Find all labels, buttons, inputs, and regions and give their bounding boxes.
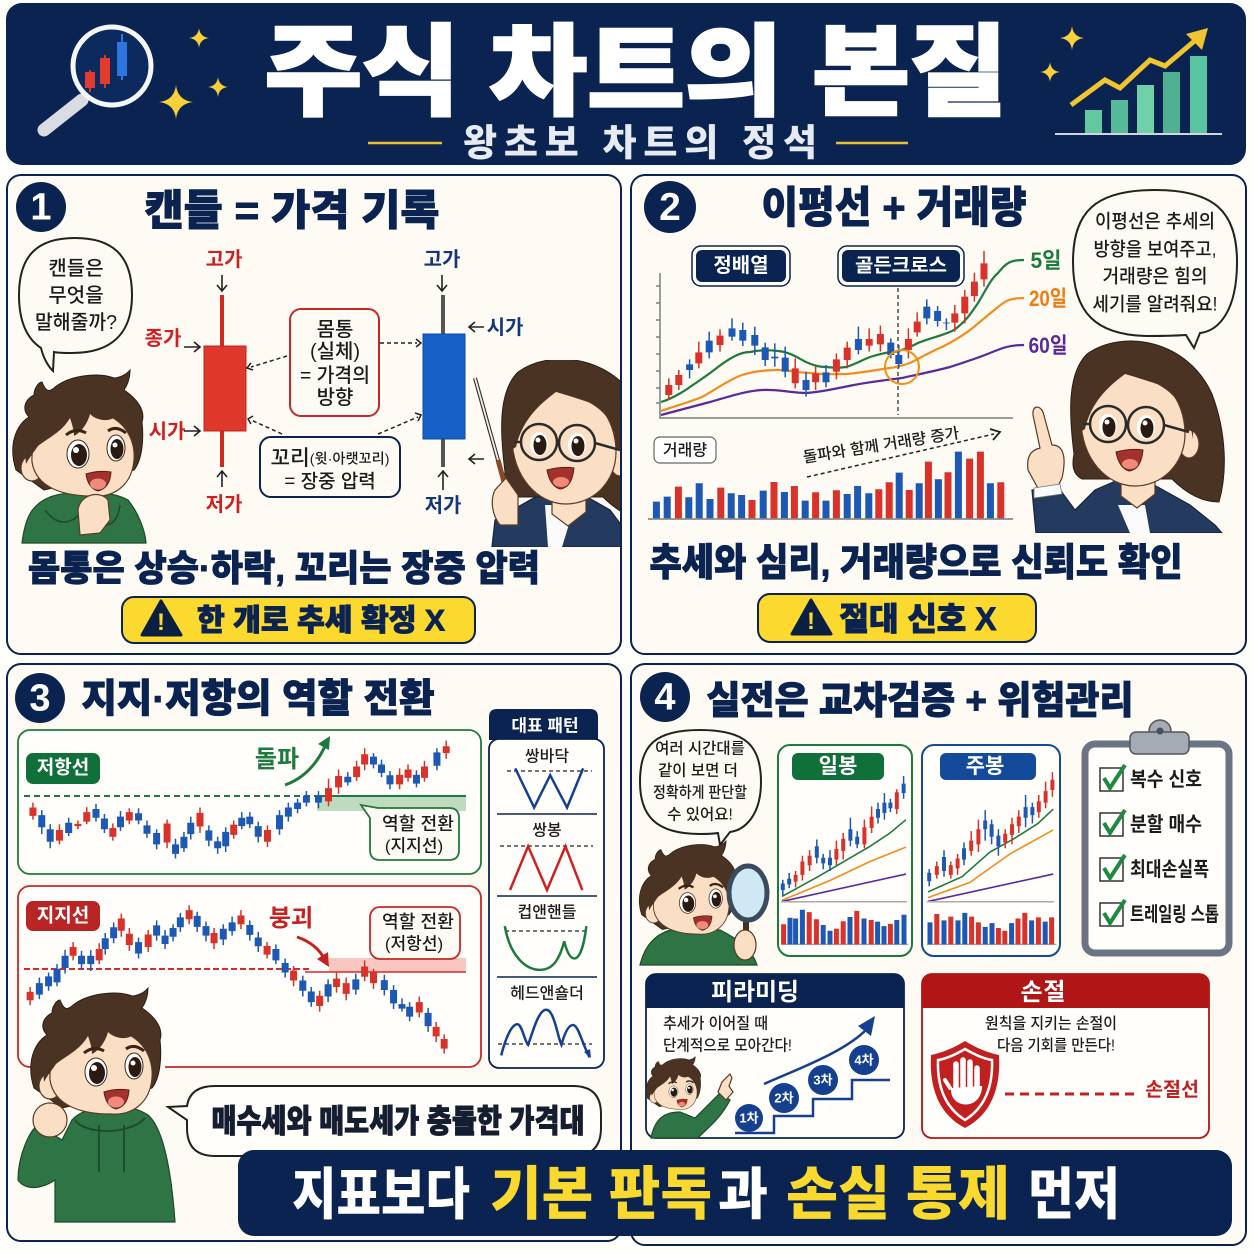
pyramiding card — [646, 974, 904, 1138]
character: boy with fist — [18, 988, 175, 1222]
check item 4 — [1100, 900, 1219, 926]
clipboard checklist — [1085, 720, 1229, 953]
heading 1: 캔들 = 가격 기록 — [144, 187, 440, 234]
speech bubble: boy question — [19, 238, 132, 371]
bottom banner: 과 — [718, 1163, 768, 1226]
tag: resistance line: 저항선 — [37, 757, 89, 779]
badge 2: 2 — [659, 186, 681, 229]
label: golden cross: 골든크로스 — [855, 256, 947, 277]
candlestick chart with moving averages — [656, 251, 1024, 418]
pattern: cup and handle — [505, 903, 588, 970]
blue candle diagram — [423, 248, 523, 517]
pyramiding card: 피라미딩 — [711, 979, 799, 1006]
check item 1: 복수 신호 — [1130, 768, 1202, 791]
breakdown label and arrow: 붕괴 — [269, 905, 313, 932]
legend: MA periods — [1028, 248, 1068, 358]
support chart box — [18, 886, 481, 1067]
callout: body: = 가격의 — [300, 364, 370, 387]
rising arrow — [764, 1016, 875, 1084]
volume bars — [648, 452, 1013, 519]
callout: wick: 꼬리(윗·아랫꼬리) — [270, 447, 390, 470]
bottom banner: 손실 통제 — [786, 1162, 1010, 1227]
red candle diagram — [145, 248, 246, 516]
pattern: double top — [500, 821, 593, 890]
icon: rising bar chart with arrow — [1040, 26, 1222, 134]
speech bubble: teacher explanation: 세기를 알려줘요! — [1092, 294, 1218, 316]
stop-loss card: 손절 — [1020, 979, 1066, 1006]
callout: becomes support — [361, 805, 459, 860]
tag: weekly: 주봉 — [966, 755, 1004, 778]
clipboard clip — [1130, 720, 1189, 754]
step badges: 4차 — [854, 1052, 874, 1067]
legend: MA periods: 20일 — [1029, 286, 1067, 311]
check item 4: 트레일링 스톱 — [1130, 903, 1219, 926]
pattern: cup and handle: 컵앤핸들 — [518, 903, 576, 921]
staircase steps — [735, 1080, 890, 1133]
badge 2 — [644, 181, 696, 233]
character: boy thinking — [13, 370, 146, 543]
speech bubble: multiple timeframes — [640, 730, 761, 845]
check item 2 — [1100, 810, 1202, 836]
pyramiding card: 추세가 이어질 때 — [663, 1014, 768, 1032]
badge 3: 3 — [29, 677, 51, 719]
speech bubble: teacher explanation — [1073, 190, 1237, 348]
tag: support line: 지지선 — [37, 905, 89, 927]
pattern: head and shoulders: 헤드앤숄더 — [510, 984, 584, 1002]
speech bubble: contested price zone — [168, 1086, 601, 1156]
label: golden cross — [838, 246, 964, 286]
pattern: double bottom — [507, 747, 592, 808]
summary 2: 추세와 심리, 거래량으로 신뢰도 확인 — [650, 542, 1182, 584]
speech bubble: multiple timeframes: 수 있어요! — [667, 805, 733, 823]
callout: becomes resistance: (저항선) — [385, 935, 443, 954]
volume increase annotation: 돌파와 함께 거래량 증가 — [802, 424, 961, 467]
callout: body: (실체) — [310, 340, 360, 363]
blue candle diagram: 저가 — [425, 494, 461, 517]
daily chart card — [778, 745, 912, 956]
warning 2: ! — [807, 608, 815, 635]
heading 4: 실전은 교차검증 + 위험관리 — [706, 680, 1134, 722]
legend: MA periods: 5일 — [1030, 248, 1062, 273]
character: teacher with pointer — [473, 360, 620, 547]
stop-loss card: 원칙을 지키는 손절이 — [985, 1014, 1117, 1032]
volume tag — [654, 437, 716, 463]
callout: body: 몸통 — [317, 319, 353, 341]
blue candle diagram: 고가 — [424, 248, 460, 271]
step badges: 2차 — [774, 1090, 794, 1105]
panel 3: support and resistance — [7, 664, 621, 1241]
speech bubble: contested price zone: 매수세와 매도세가 충돌한 가격대 — [212, 1103, 584, 1139]
callout: becomes resistance — [370, 907, 460, 959]
arrows: dashed pointers — [247, 339, 421, 434]
icon: stop shield — [931, 1041, 999, 1128]
speech bubble: teacher explanation: 방향을 보여주고, — [1094, 239, 1216, 261]
step badges: 1차 — [739, 1110, 759, 1125]
callout: wick: = 장중 압력 — [284, 471, 376, 493]
breakdown label and arrow — [269, 905, 329, 967]
warning 1: ! — [157, 609, 165, 636]
panel 1: candles — [7, 175, 655, 654]
patterns tab: 대표 패턴 — [511, 717, 579, 736]
stop-loss label: 손절선 — [1145, 1079, 1199, 1101]
stop-loss card: 다음 기회를 만든다! — [997, 1036, 1115, 1054]
callout: body — [290, 309, 379, 416]
label: ordered alignment — [692, 246, 790, 286]
warning 1: 한 개로 추세 확정 X — [197, 604, 445, 637]
speech bubble: boy question: 무엇을 — [48, 284, 104, 307]
character: small boy pointing — [646, 1056, 733, 1138]
speech bubble: multiple timeframes: 여러 시간대를 — [655, 739, 745, 757]
red candle diagram: 종가 — [145, 327, 181, 350]
speech bubble: boy question: 캔들은 — [48, 257, 104, 280]
warning 2: 절대 신호 X — [840, 601, 997, 637]
icon: magnifying glass with candles — [44, 27, 151, 130]
callout: body: 방향 — [317, 386, 353, 409]
pyramiding card: 단계적으로 모아간다! — [663, 1036, 792, 1054]
subtitle: 왕초보 차트의 정석 — [463, 123, 817, 164]
bottom banner: 지표보다 — [292, 1163, 470, 1226]
legend: MA periods: 60일 — [1028, 333, 1068, 358]
warning 2 — [758, 594, 1036, 642]
tag: resistance line — [26, 753, 100, 784]
speech bubble: multiple timeframes: 같이 보면 더 — [658, 761, 738, 779]
pattern: double bottom: 쌍바닥 — [525, 747, 569, 765]
blue candle diagram: 시가 — [487, 316, 523, 339]
title: 주식 차트의 본질 — [264, 16, 1008, 127]
stop-loss dashed line — [1005, 1092, 1135, 1096]
tag: weekly — [940, 753, 1036, 780]
weekly chart card — [922, 745, 1060, 956]
callout: becomes support: (지지선) — [385, 837, 443, 856]
badge 1 — [16, 182, 66, 232]
speech bubble: boy question: 말해줄까? — [35, 311, 117, 334]
red candle diagram: 고가 — [206, 248, 242, 271]
representative patterns sidebar — [489, 709, 604, 1068]
breakout label and arrow: 돌파 — [255, 746, 299, 773]
red candle diagram: 시가 — [149, 420, 185, 443]
pattern: double top: 쌍봉 — [532, 821, 562, 839]
character: teacher pointing — [1028, 341, 1224, 533]
volume tag: 거래량 — [663, 441, 707, 459]
heading 2: 이평선 + 거래량 — [762, 185, 1026, 233]
tag: support line — [26, 901, 100, 931]
badge 4: 4 — [654, 676, 676, 718]
tag: daily: 일봉 — [819, 755, 857, 778]
badge 4 — [640, 672, 690, 722]
badge 3 — [15, 673, 65, 723]
callout: becomes support: 역할 전환 — [382, 814, 454, 834]
check item 2: 분할 매수 — [1130, 813, 1202, 836]
resistance chart box — [18, 730, 481, 874]
badge 1: 1 — [30, 186, 52, 228]
panel 4: cross-check and risk management — [631, 664, 1246, 1245]
summary 1: 몸통은 상승·하락, 꼬리는 장중 압력 — [28, 548, 540, 589]
panel 2: moving averages and volume — [631, 175, 1246, 654]
breakout label and arrow — [255, 736, 330, 785]
pattern: head and shoulders — [498, 984, 592, 1058]
check item 3: 최대손실폭 — [1130, 858, 1209, 881]
callout: becomes resistance: 역할 전환 — [382, 912, 454, 932]
red candle diagram: 저가 — [206, 493, 242, 516]
tag: daily — [792, 753, 884, 780]
label: ordered alignment: 정배열 — [713, 254, 769, 277]
check item 1 — [1100, 765, 1202, 791]
heading 3: 지지·저항의 역할 전환 — [82, 678, 434, 721]
patterns tab — [489, 709, 598, 740]
speech bubble: teacher explanation: 이평선은 추세의 — [1095, 211, 1215, 233]
check item 3 — [1100, 855, 1209, 881]
warning 1 — [122, 597, 475, 643]
speech bubble: teacher explanation: 거래량은 힘의 — [1102, 266, 1208, 288]
volume increase annotation — [802, 424, 1000, 477]
speech bubble: multiple timeframes: 정확하게 판단할 — [653, 783, 747, 801]
icon: sparkles left — [159, 28, 228, 119]
stop-loss card — [922, 974, 1209, 1138]
bottom banner: 먼저 — [1028, 1163, 1120, 1226]
callout: wick — [260, 437, 400, 497]
step badges — [735, 1045, 879, 1132]
step badges: 3차 — [813, 1072, 833, 1087]
header banner — [6, 3, 1246, 165]
bottom banner: 기본 판독 — [490, 1162, 712, 1227]
bottom banner — [238, 1150, 1232, 1236]
character: boy with magnifier — [639, 841, 767, 965]
